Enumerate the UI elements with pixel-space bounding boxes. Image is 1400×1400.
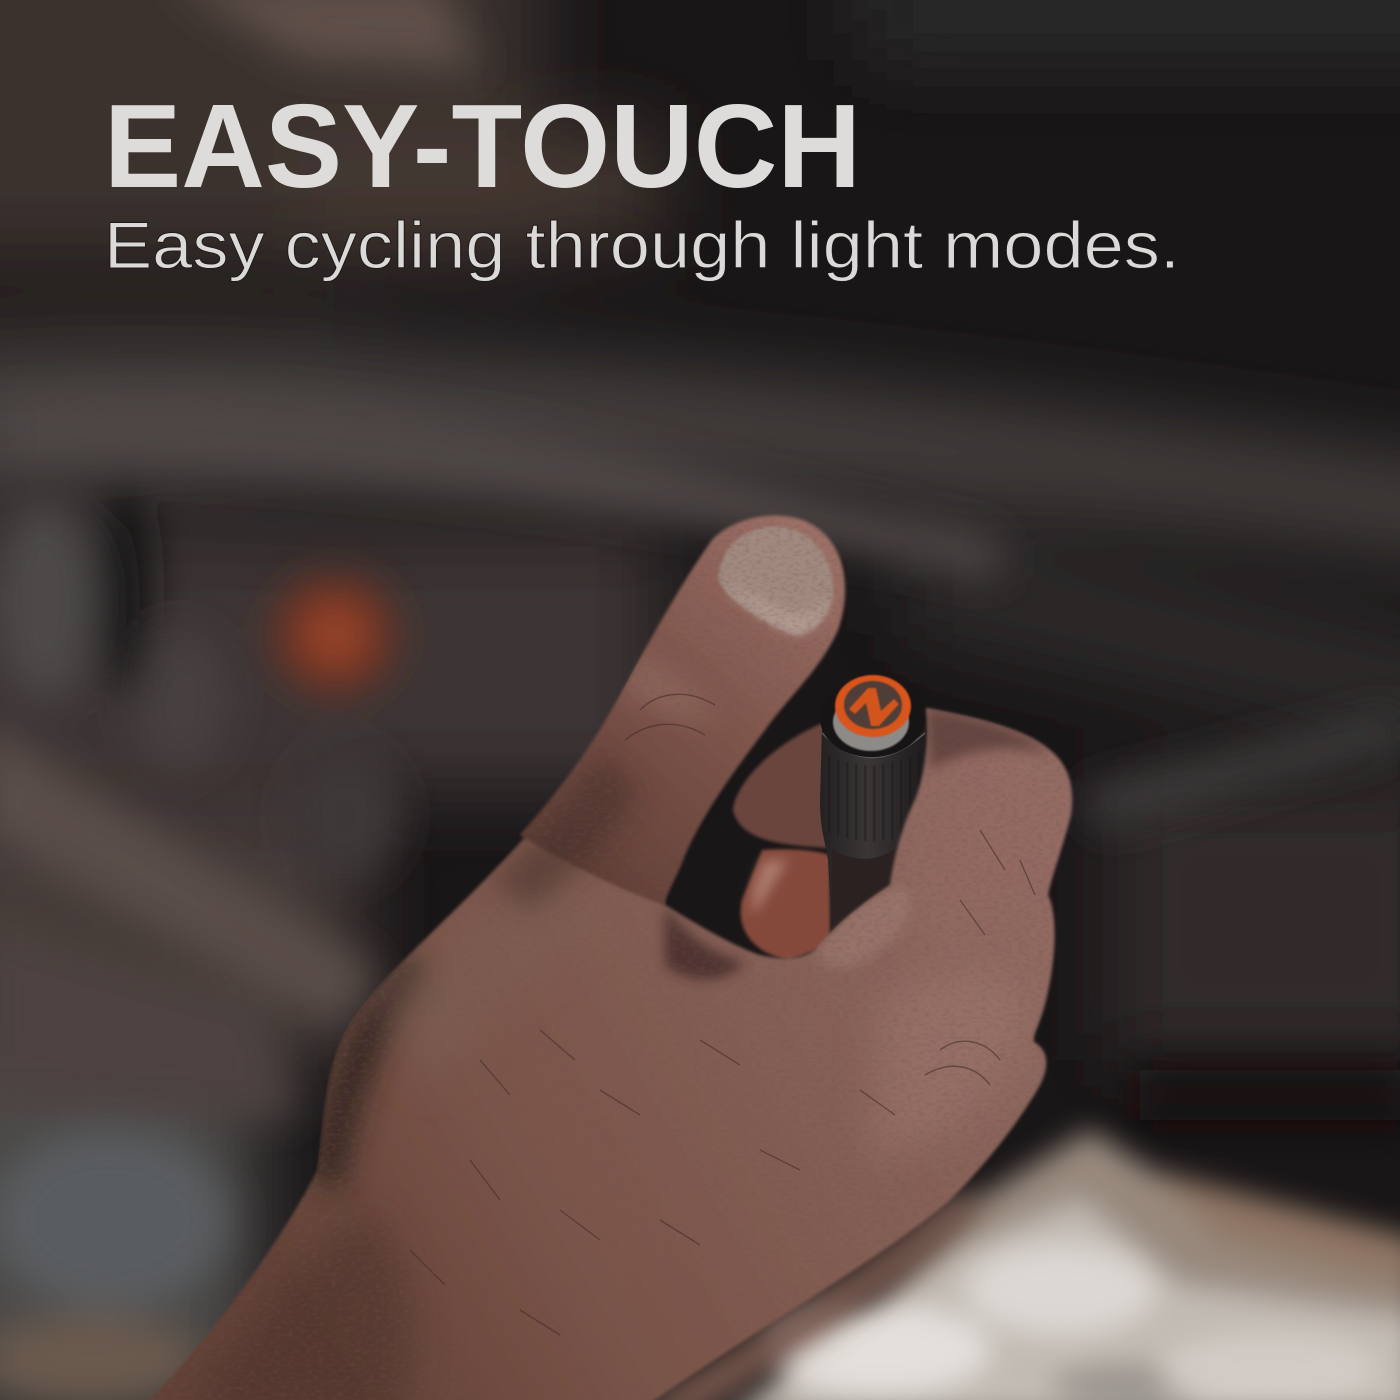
knuckle creases and hairs [410, 694, 1035, 1335]
button: orange ring [835, 675, 911, 737]
button base [833, 693, 909, 751]
penlight body [818, 674, 928, 935]
title: EASY-TOUCH [104, 80, 861, 213]
thumb [520, 516, 845, 905]
thumbnail [718, 527, 833, 635]
background: bright fabric, bottom right [720, 1130, 1400, 1400]
background: cuff beside wrist [620, 1195, 985, 1400]
subtitle: Easy cycling through light modes. [104, 208, 1180, 282]
button: Z logo [849, 688, 899, 726]
fingers behind the penlight [733, 722, 850, 960]
hand holding the penlight [150, 514, 1074, 1400]
fingertip highlight [752, 860, 788, 915]
skin shading [203, 518, 1064, 1400]
penlight head collar [818, 674, 928, 760]
back of hand and knuckles [140, 708, 1072, 1400]
skin texture [238, 518, 1063, 1396]
